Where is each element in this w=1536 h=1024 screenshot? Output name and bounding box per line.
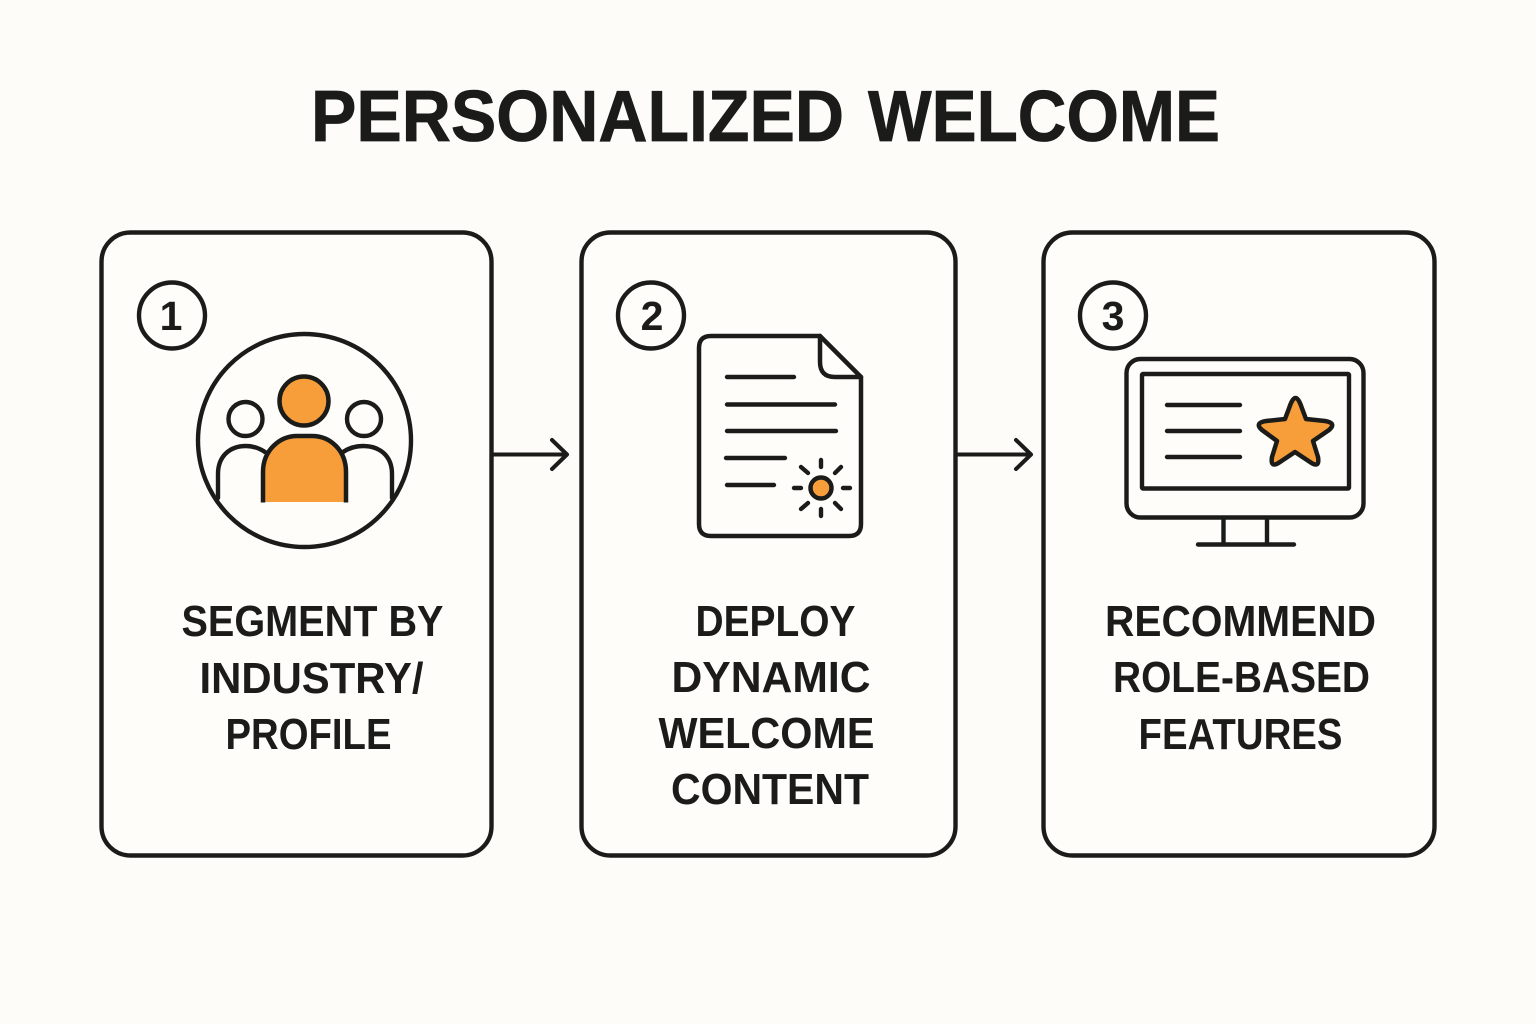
step 2 number badge [618, 282, 684, 348]
icon: document with gear [699, 336, 861, 536]
step 2 label: DYNAMIC [672, 654, 870, 702]
arrow: step 2 to step 3 [957, 440, 1031, 469]
title [311, 77, 1220, 157]
step 2 label: DEPLOY [696, 598, 856, 646]
step 3 label: RECOMMEND [1105, 598, 1376, 646]
panel: step 2 [582, 232, 956, 856]
step 1 number badge [139, 282, 205, 348]
step 2 label [658, 598, 874, 814]
arrow: step 1 to step 2 [493, 440, 567, 469]
icon: group of people [198, 334, 411, 547]
icon: monitor with star [1126, 359, 1364, 544]
step 3 label [1105, 598, 1376, 759]
step 3 number badge: 3 [1102, 293, 1124, 339]
panel: step 1 [102, 232, 492, 856]
step 2 label: WELCOME [658, 710, 874, 758]
title: WELCOME [868, 77, 1220, 157]
step 1 label: SEGMENT BY [182, 598, 444, 646]
step 3 label: FEATURES [1138, 711, 1342, 759]
step 3 label: ROLE-BASED [1113, 654, 1370, 702]
step 2 label: CONTENT [671, 766, 869, 814]
step 1 number badge: 1 [160, 293, 182, 339]
step 1 label [182, 598, 444, 759]
title: PERSONALIZED [311, 77, 844, 157]
step 1 label: INDUSTRY/ [200, 655, 424, 703]
step 1 label: PROFILE [226, 711, 392, 759]
panel: step 3 [1044, 232, 1434, 856]
step 2 number badge: 2 [641, 293, 663, 339]
step 3 number badge [1080, 282, 1146, 348]
